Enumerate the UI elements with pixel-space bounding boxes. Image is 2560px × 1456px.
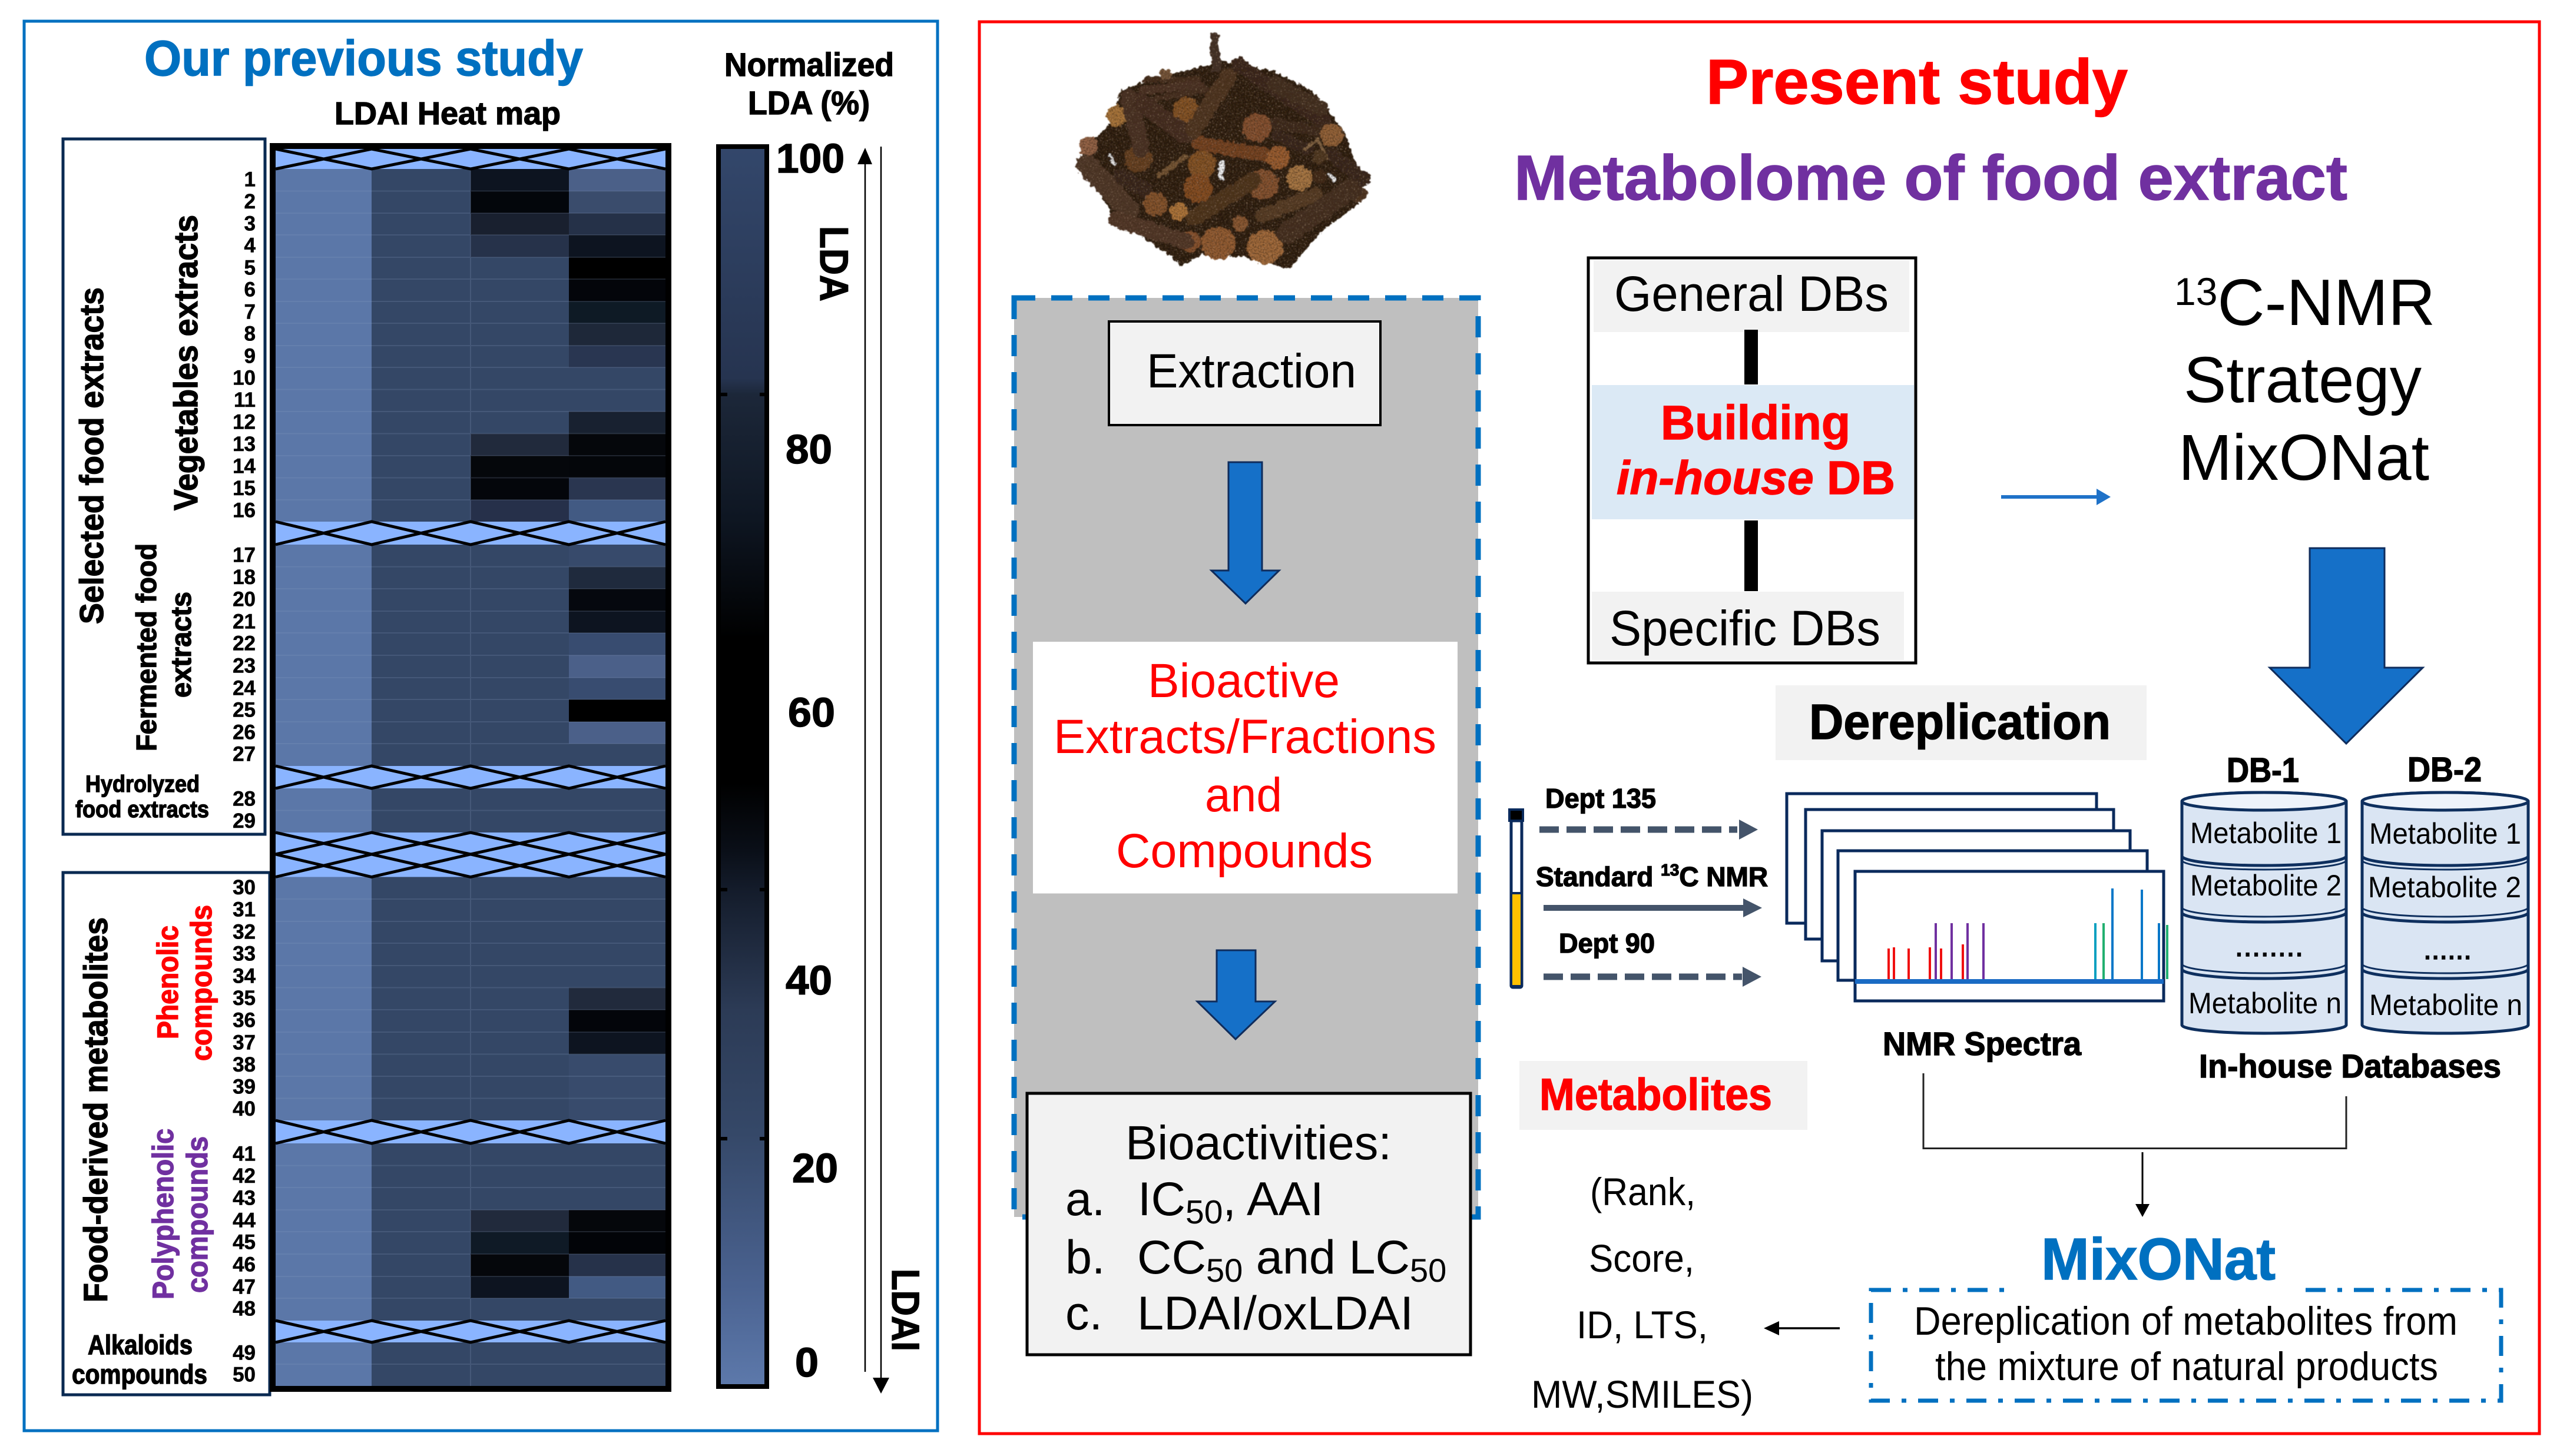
row numbers: 26 <box>233 721 256 744</box>
box: bioactive extracts: Bioactive <box>1148 654 1340 708</box>
label: dept 135: Dept 135 <box>1545 783 1656 814</box>
row numbers: 20 <box>233 588 256 611</box>
row numbers: 15 <box>233 477 256 500</box>
heading: LDAI heat map: LDAI Heat map <box>335 96 561 131</box>
icon: database 1: Metabolite n <box>2188 987 2342 1020</box>
heading: normalized LDA: Normalized <box>724 46 894 83</box>
row numbers: 9 <box>244 345 256 367</box>
label: selected food extracts: Selected food extracts <box>73 287 111 624</box>
arrow: LDA up <box>857 148 872 1372</box>
row numbers: 2 <box>244 190 256 213</box>
box: bioactivities: , AAI <box>1223 1173 1324 1226</box>
label: dept 90: Dept 90 <box>1559 928 1655 958</box>
row numbers: 33 <box>233 942 256 966</box>
row numbers <box>233 168 256 1386</box>
text: metabolite attributes <box>1531 1170 1753 1416</box>
box: bioactive extracts: Compounds <box>1116 824 1373 878</box>
box: MixONat description: Dereplication of metabolites from <box>1914 1299 2458 1344</box>
row numbers: 11 <box>234 389 256 412</box>
icon: database 1: ........ <box>2235 930 2303 963</box>
colour bar tick labels: 80 <box>786 426 832 472</box>
row numbers: 22 <box>233 632 256 655</box>
icon: database 2: Metabolite 1 <box>2369 817 2521 850</box>
text: 13C-NMR strategy MixONat: 13 <box>2174 270 2217 313</box>
box: MixONat description <box>1871 1283 2501 1401</box>
label: DB-2: DB-2 <box>2407 751 2482 789</box>
arrow: bioactive to bioactivities <box>1197 950 1275 1039</box>
row numbers: 16 <box>233 499 256 522</box>
box: bioactivities <box>1027 1093 1471 1355</box>
label: LDA: LDA <box>812 226 856 301</box>
text: metabolite attributes: ID, LTS, <box>1577 1303 1708 1346</box>
arrow: standard 13C NMR <box>1544 898 1762 917</box>
icon: NMR tube <box>1509 810 1523 987</box>
row numbers: 18 <box>233 566 256 589</box>
row numbers: 7 <box>244 300 256 324</box>
box: bioactivities: CC <box>1137 1231 1206 1284</box>
icon: database 2: Metabolite 2 <box>2368 871 2521 904</box>
label box: food-derived metabolites <box>63 873 270 1395</box>
chart: NMR spectra stack <box>1787 794 2167 1001</box>
heading: normalized LDA: LDA (%) <box>748 84 870 121</box>
icon: database 2: Metabolite n <box>2369 989 2522 1021</box>
row numbers: 37 <box>233 1032 256 1054</box>
arrow: extraction to bioactive <box>1211 462 1279 603</box>
heading: metabolome of food extract: Metabolome of food extract <box>1514 142 2347 213</box>
box: bioactivities: 50 <box>1206 1252 1243 1289</box>
box: extraction: Extraction <box>1147 344 1356 398</box>
box: bioactivities: b. <box>1065 1231 1105 1284</box>
arrow: databases to strategy <box>2001 489 2111 505</box>
box: bioactivities: Bioactivities: <box>1125 1116 1392 1170</box>
heat map <box>270 143 671 1392</box>
row numbers: 6 <box>244 278 256 301</box>
text: 13C-NMR strategy MixONat: Strategy <box>2184 344 2422 416</box>
box: bioactivities: 50 <box>1185 1193 1223 1231</box>
box: databases <box>1588 258 1916 663</box>
label: LDAI: LDAI <box>884 1269 928 1351</box>
arrow: dept 90 <box>1544 967 1761 987</box>
arrow: strategy to databases <box>2270 548 2423 744</box>
row numbers: 32 <box>233 921 256 943</box>
arrow: MixONat to metabolites <box>1764 1321 1840 1335</box>
box: bioactive extracts: and <box>1205 768 1282 822</box>
label: standard 13C NMR: Standard <box>1536 861 1653 892</box>
box: MixONat description: the mixture of natural products <box>1935 1344 2438 1389</box>
label: compounds purple: compounds <box>181 1136 214 1293</box>
row numbers: 8 <box>244 323 256 345</box>
row numbers: 34 <box>233 964 256 988</box>
box: metabolites: Metabolites <box>1539 1070 1772 1120</box>
icon: database 2 <box>2362 792 2528 1033</box>
box: bioactivities: and LC <box>1243 1231 1410 1284</box>
building in-house DB: Building <box>1661 396 1850 450</box>
text: 13C-NMR strategy MixONat: MixONat <box>2178 422 2429 494</box>
row numbers: 42 <box>233 1165 256 1188</box>
row numbers: 29 <box>233 810 256 833</box>
icon: database 1 <box>2182 792 2346 1033</box>
label: compounds: compounds <box>72 1359 207 1389</box>
row numbers: 27 <box>233 743 256 765</box>
label: NMR spectra: NMR Spectra <box>1883 1025 2082 1062</box>
text: 13C-NMR strategy MixONat: C-NMR <box>2217 266 2435 339</box>
label: food extracts: food extracts <box>75 797 209 822</box>
label box: selected food extracts <box>63 139 265 834</box>
connector bars <box>1744 330 1758 591</box>
heat map dark cells: column 4 <box>569 169 665 1298</box>
box: bioactive extracts <box>1033 642 1458 894</box>
text: metabolite attributes: Score, <box>1589 1236 1694 1280</box>
arrow: dept 135 <box>1539 820 1758 840</box>
colour bar tick labels: 20 <box>792 1145 838 1191</box>
label: standard 13C NMR: 13 <box>1661 861 1679 879</box>
arrow: LDAI down <box>873 147 889 1394</box>
box: bioactivities: LDAI/oxLDAI <box>1137 1287 1413 1340</box>
heading: normalized LDA <box>724 46 894 121</box>
label: polyphenolic: Polyphenolic <box>147 1129 180 1299</box>
row numbers: 41 <box>233 1142 256 1166</box>
label: standard 13C NMR: C NMR <box>1679 861 1768 892</box>
row numbers: 5 <box>244 257 256 279</box>
row numbers: 21 <box>233 610 256 634</box>
panel: extraction workflow <box>1014 298 1478 1355</box>
row numbers: 3 <box>244 212 256 236</box>
row numbers: 43 <box>233 1187 256 1209</box>
row numbers: 47 <box>233 1275 256 1299</box>
text: metabolite attributes: MW,SMILES) <box>1531 1372 1753 1416</box>
row numbers: 1 <box>244 168 256 191</box>
row numbers: 17 <box>233 544 256 566</box>
colour bar tick labels: 40 <box>786 957 832 1003</box>
box: bioactivities: a. <box>1065 1173 1105 1226</box>
image: dried cloves <box>1079 37 1367 269</box>
label: compounds red: compounds <box>185 905 218 1061</box>
row numbers: 14 <box>233 455 256 478</box>
heading: dereplication <box>1776 685 2147 760</box>
text: 13C-NMR strategy MixONat <box>2174 266 2435 494</box>
heading: dereplication: Dereplication <box>1809 694 2111 749</box>
box: extraction <box>1109 321 1380 425</box>
heading: our previous study: Our previous study <box>144 31 583 86</box>
heading: MixONat: MixONat <box>2041 1226 2276 1292</box>
hatched missing rows <box>276 149 665 1342</box>
box: bioactivities: 50 <box>1410 1252 1446 1289</box>
label: alkaloids: Alkaloids <box>88 1329 193 1360</box>
box: bioactive extracts: Extracts/Fractions <box>1054 710 1436 764</box>
row numbers: 38 <box>233 1053 256 1076</box>
row numbers: 45 <box>233 1231 256 1254</box>
label: fermented food: Fermented food <box>131 543 163 751</box>
row numbers: 35 <box>233 987 256 1010</box>
colour bar <box>718 147 767 1387</box>
colour bar tick labels: 60 <box>788 689 835 735</box>
row numbers: 50 <box>233 1364 256 1386</box>
general DBs <box>1594 260 1909 332</box>
row numbers: 12 <box>233 411 256 433</box>
row numbers: 40 <box>233 1097 256 1120</box>
row numbers: 25 <box>233 698 256 722</box>
icon: database 2: ...... <box>2423 933 2472 966</box>
row numbers: 23 <box>233 655 256 677</box>
row numbers: 30 <box>233 876 256 899</box>
connector: spectra and databases to MixONat <box>1923 1073 2346 1217</box>
specific DBs: Specific DBs <box>1609 601 1880 656</box>
row numbers: 28 <box>233 788 256 810</box>
label: extracts: extracts <box>166 592 197 698</box>
row numbers: 49 <box>233 1341 256 1365</box>
colour bar tick labels: 100 <box>776 135 844 181</box>
general DBs: General DBs <box>1614 266 1889 321</box>
heading: present study: Present study <box>1706 46 2128 117</box>
label: DB-1: DB-1 <box>2227 751 2299 790</box>
label: in-house databases: In-house Databases <box>2199 1047 2501 1084</box>
colour bar tick labels: 0 <box>795 1339 819 1385</box>
label: food-derived metabolites: Food-derived metabolites <box>77 917 115 1302</box>
heat map dark cells: column 3 <box>471 169 569 1298</box>
icon: database 1: Metabolite 1 <box>2190 817 2342 850</box>
panel: present study <box>979 22 2539 1434</box>
row numbers: 36 <box>233 1009 256 1032</box>
row numbers: 31 <box>233 898 256 921</box>
row numbers: 4 <box>244 234 256 257</box>
row numbers: 48 <box>233 1298 256 1320</box>
label: hydrolyzed: Hydrolyzed <box>85 771 200 797</box>
colour bar tick labels <box>776 135 844 1385</box>
box: bioactivities: c. <box>1065 1287 1102 1340</box>
row numbers: 44 <box>233 1209 256 1232</box>
row numbers: 13 <box>233 433 256 456</box>
row numbers: 39 <box>233 1075 256 1099</box>
spectrum peaks <box>1889 888 2167 982</box>
building in-house DB: in-house DB <box>1617 452 1895 504</box>
building in-house DB <box>1592 385 1914 519</box>
text: metabolite attributes: (Rank, <box>1590 1170 1695 1213</box>
box: metabolites <box>1519 1061 1807 1130</box>
label: vegetables extracts: Vegetables extracts <box>167 215 205 510</box>
row numbers: 24 <box>233 677 256 699</box>
box: bioactivities: IC <box>1138 1173 1185 1226</box>
row numbers: 10 <box>233 366 256 390</box>
panel: our previous study <box>24 21 938 1431</box>
icon: database 1: Metabolite 2 <box>2190 869 2342 902</box>
row numbers: 46 <box>233 1253 256 1276</box>
label: phenolic: Phenolic <box>151 926 184 1039</box>
